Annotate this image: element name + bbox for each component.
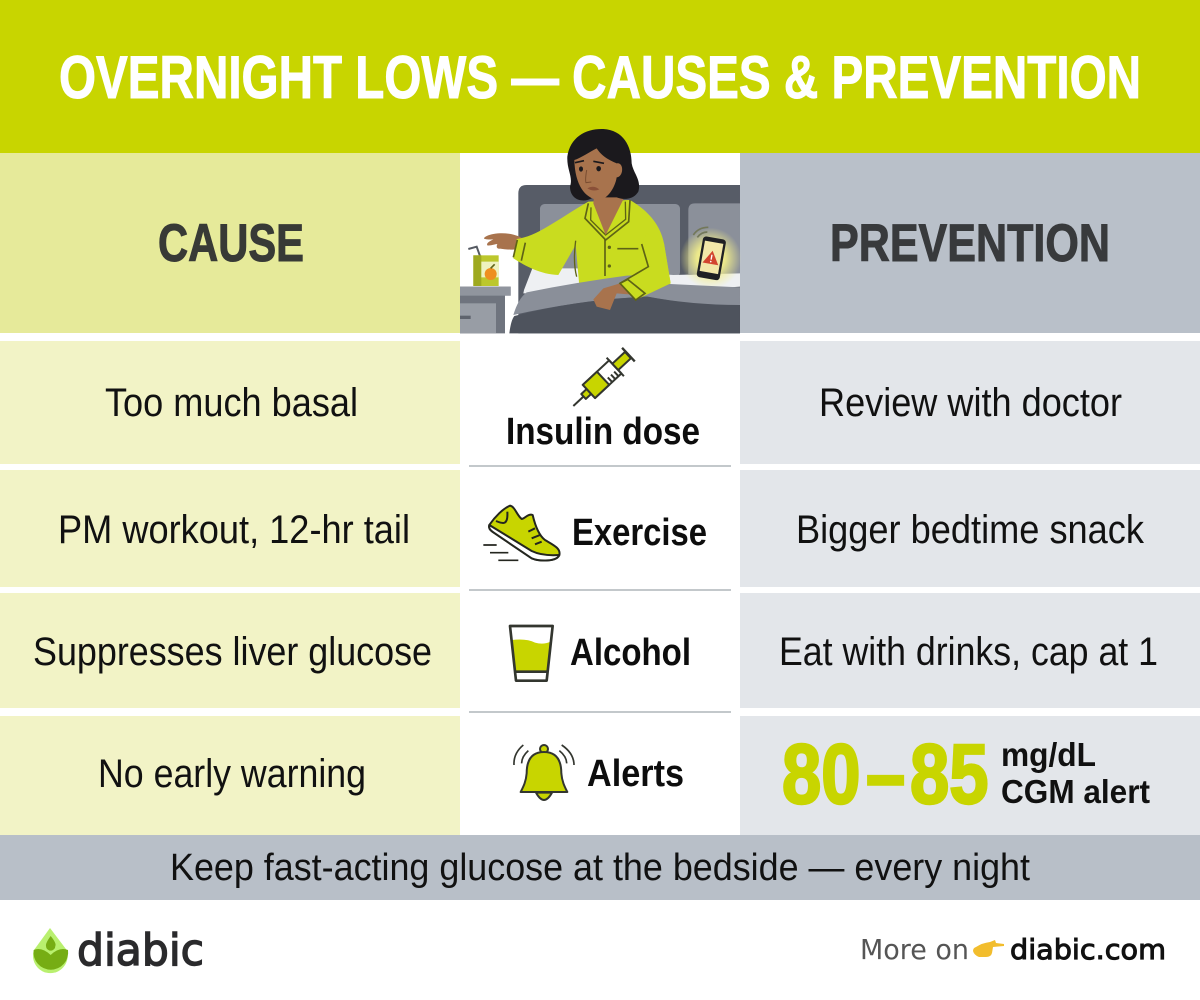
footer link: diabic.com	[1010, 933, 1166, 966]
row: review with doctor	[740, 341, 1200, 464]
row: eat with drinks: Eat with drinks, cap at 1	[779, 630, 1158, 674]
icon: bell	[514, 745, 574, 800]
row: no early warning: No early warning	[98, 752, 366, 796]
label: exercise: Exercise	[572, 512, 707, 554]
label: alcohol: Alcohol	[570, 632, 691, 674]
icon: glass	[510, 626, 553, 681]
label: insulin dose: Insulin dose	[506, 411, 700, 453]
row: bigger bedtime snack: Bigger bedtime snack	[796, 508, 1145, 552]
row: too much basal	[0, 341, 460, 464]
row: review with doctor: Review with doctor	[819, 381, 1122, 425]
label: alcohol	[510, 626, 691, 681]
row: pm workout	[0, 470, 460, 587]
icon: syringe	[565, 345, 637, 415]
panel: cause header	[0, 153, 460, 333]
logo: diabic: diabic	[77, 925, 204, 976]
row: eat with drinks	[740, 593, 1200, 708]
footer link: More on	[860, 933, 969, 966]
row: no early warning	[0, 716, 460, 835]
heading: cause: CAUSE	[158, 214, 304, 273]
icon: pointing hand	[973, 940, 1004, 957]
label: alerts: Alerts	[587, 753, 684, 795]
panel: prevention rows	[740, 341, 1200, 835]
panel: prevention header	[740, 153, 1200, 333]
alert label: CGM alert	[1001, 773, 1150, 810]
row: pm workout: PM workout, 12-hr tail	[58, 508, 410, 552]
label: exercise	[483, 506, 707, 561]
icon: drop	[33, 928, 68, 973]
callout: bedside glucose reminder	[0, 835, 1200, 900]
row: bigger bedtime snack	[740, 470, 1200, 587]
row: too much basal: Too much basal	[105, 381, 358, 425]
label: insulin dose	[506, 345, 700, 453]
unit label: mg/dL	[1001, 736, 1096, 773]
callout: bedside glucose reminder: Keep fast-acting glucose at the bedside — every night	[170, 847, 1030, 889]
big number: 80–85	[782, 728, 988, 821]
row: suppresses liver glucose: Suppresses liver glucose	[33, 630, 432, 674]
heading: prevention: PREVENTION	[830, 214, 1110, 273]
illustration: woman in bed reaching for juice with phone alert	[460, 129, 741, 333]
footer link	[860, 933, 1166, 966]
title banner	[0, 0, 1200, 153]
panel: cause rows	[0, 341, 460, 835]
label: alerts	[514, 745, 684, 800]
row: CGM alert	[740, 716, 1200, 835]
row: suppresses liver glucose	[0, 593, 460, 708]
icon: running shoe	[483, 506, 560, 561]
